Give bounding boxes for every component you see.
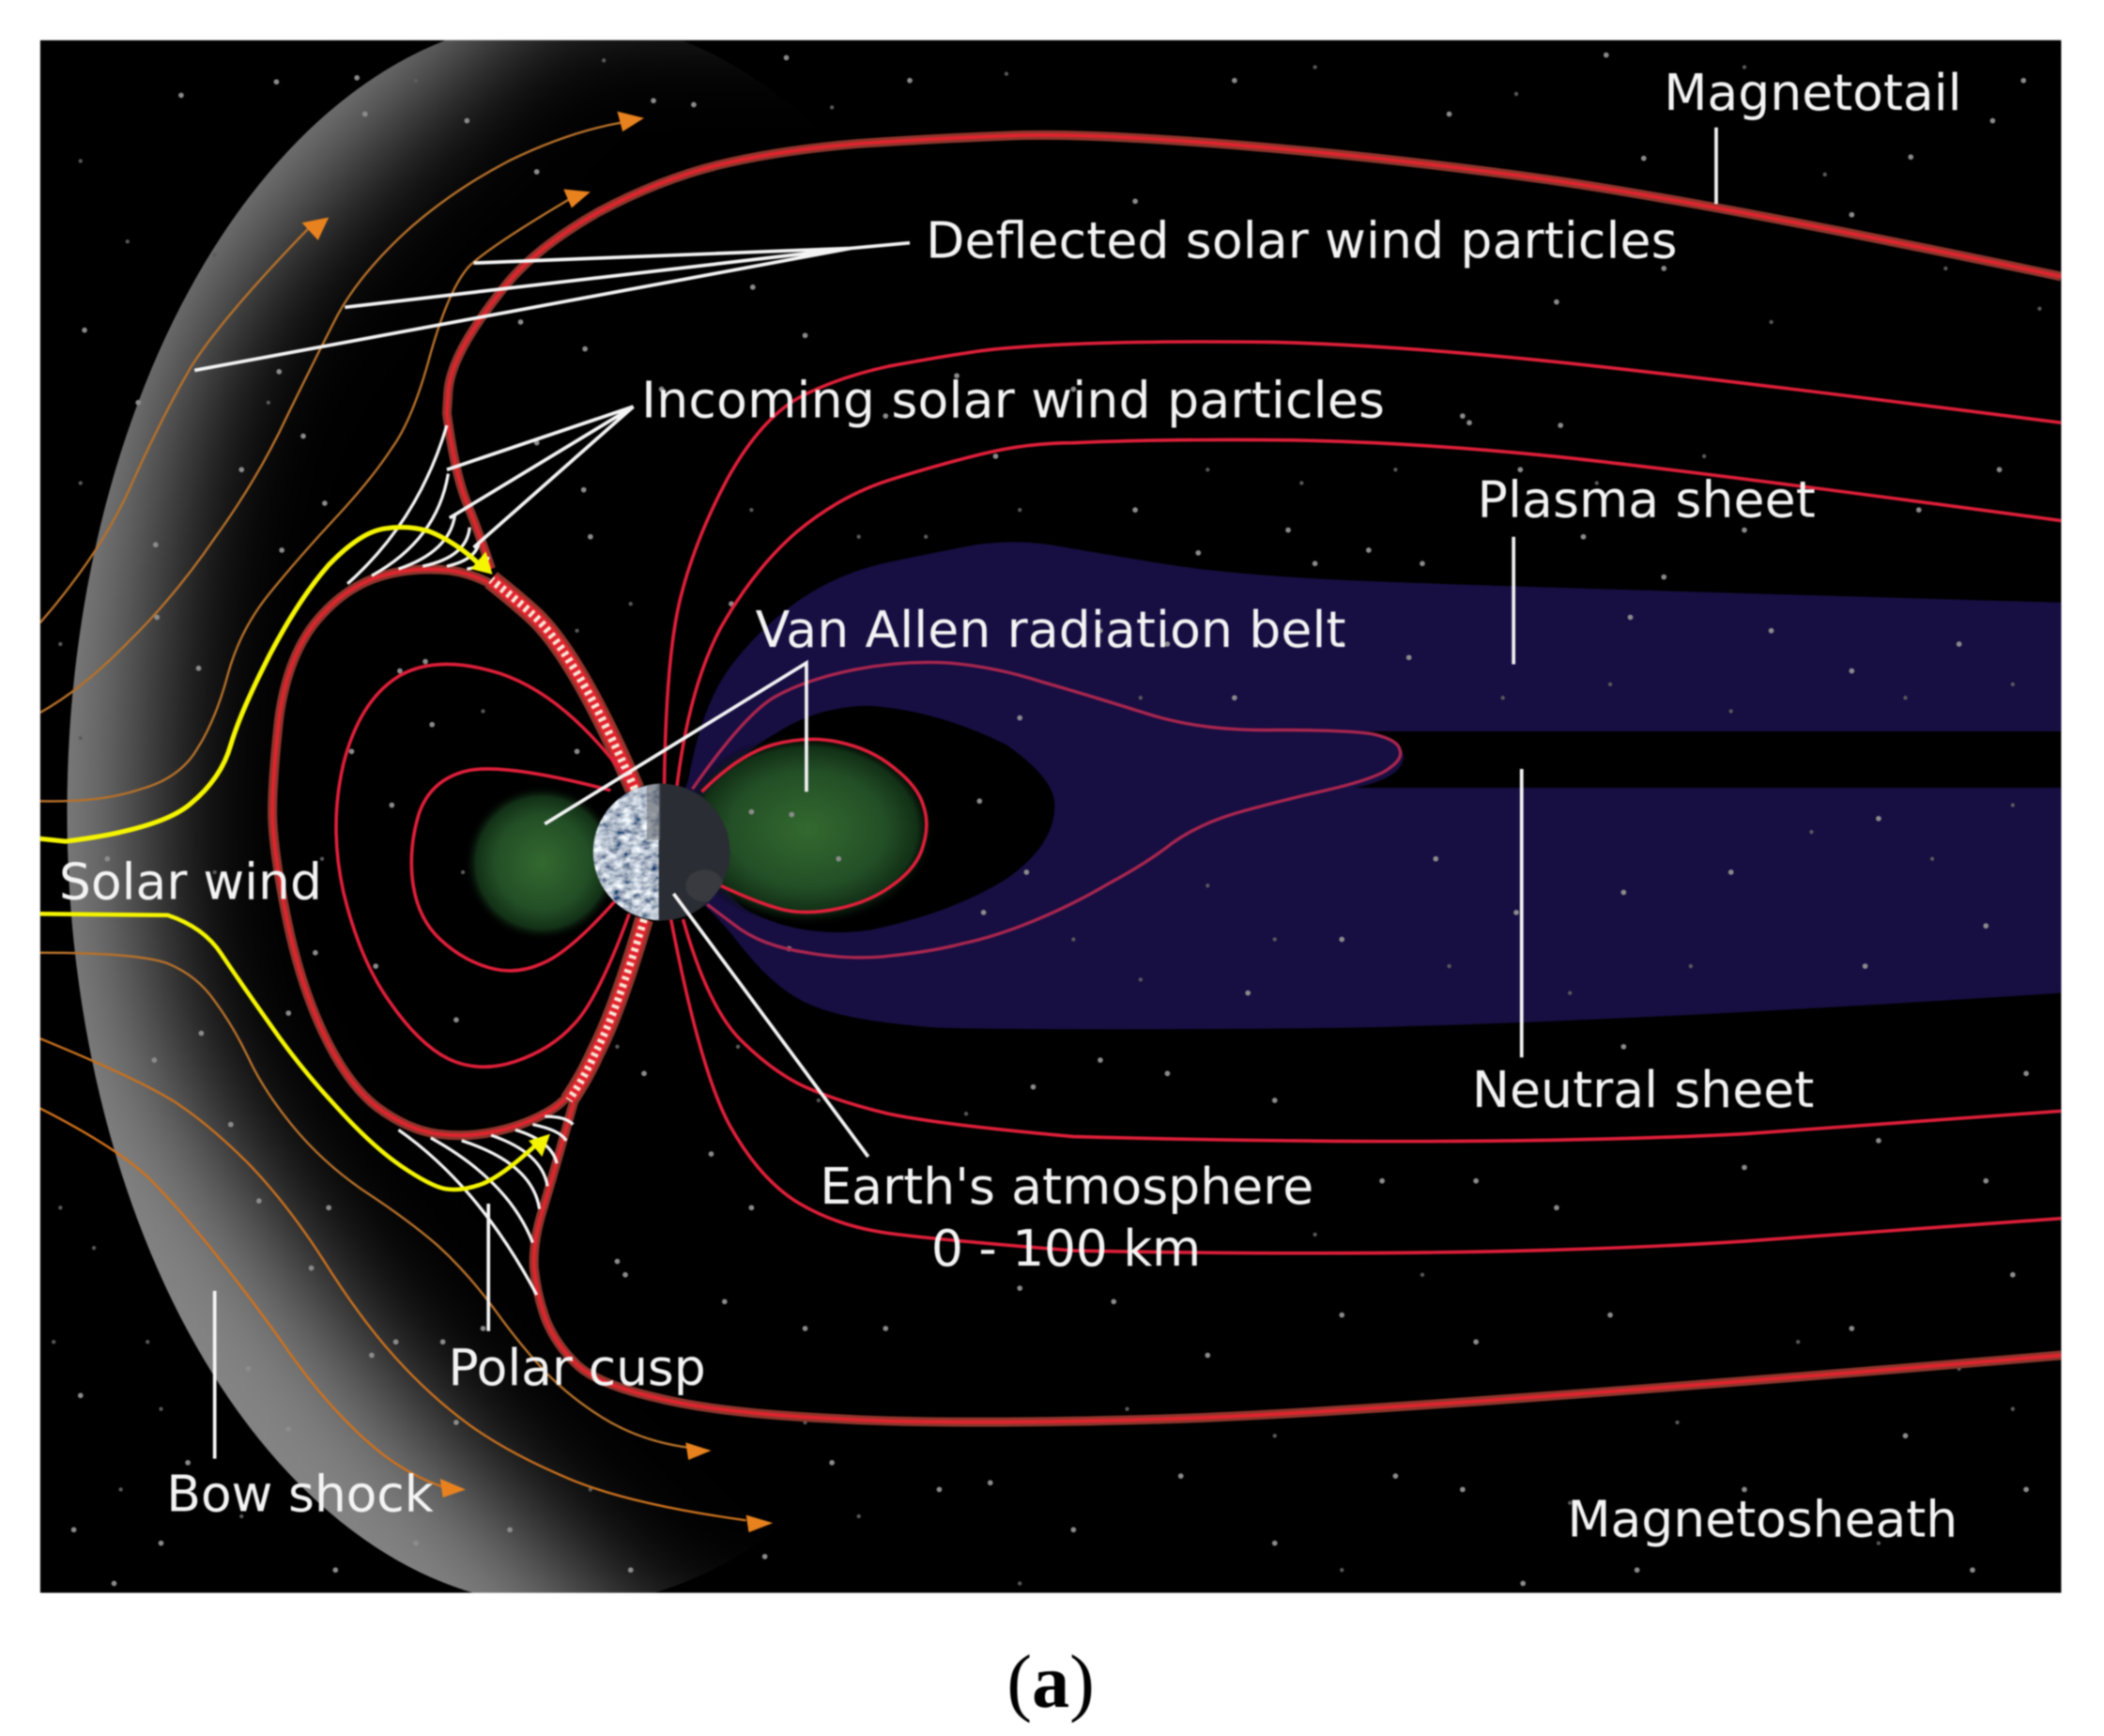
label: magnetosheath: Magnetosheath [1567,1489,1958,1548]
label: solar wind: Solar wind [59,853,322,912]
hatched particle band upper [491,579,635,789]
lower cusp particle fan [398,1116,573,1295]
solar wind particle path upper [40,528,493,841]
deflected particle arrow 3 [40,190,591,801]
label: neutral sheet: Neutral sheet [1472,1060,1814,1119]
outer magnetotail field line bottom [534,1095,2061,1422]
upper cusp particle fan [347,425,488,584]
closed dayside magnetic loop [267,563,570,1142]
label: van allen belt: Van Allen radiation belt [756,600,1345,659]
earth globe [591,781,732,923]
label: magnetotail: Magnetotail [1664,63,1962,122]
outer magnetotail field line top [447,135,2061,569]
field lines through plasma sheet [692,662,1401,958]
label: earth's atmosphere: Earth's atmosphere [820,1157,1313,1216]
label: altitude range: 0 - 100 km [931,1219,1201,1278]
solar wind particle path lower [40,914,550,1190]
hatched particle band lower [569,919,644,1100]
inner dark cavity [704,706,1054,932]
van allen belt: right lobe [693,741,928,920]
deflected particle arrow 6 [40,1109,466,1498]
plasma sheet region [678,542,2061,1029]
labels [59,63,1962,1548]
deflected particle arrow 5 [40,1038,773,1532]
deflected particle arrow 2 [40,112,644,713]
van allen belt: left lobe [469,790,607,935]
deflected particle arrow 1 [40,218,329,622]
label: plasma sheet: Plasma sheet [1478,469,1816,529]
field lines around earth [336,342,2061,1253]
deflected particle arrow 4 [40,953,711,1460]
label: bow shock: Bow shock [166,1464,434,1523]
label: deflected particles: Deflected solar wind particles [926,210,1678,269]
panel caption: (a) [1006,1641,1095,1724]
label: incoming particles: Incoming solar wind particles [641,371,1385,430]
leader lines [194,128,1716,1459]
label: polar cusp: Polar cusp [448,1338,706,1397]
